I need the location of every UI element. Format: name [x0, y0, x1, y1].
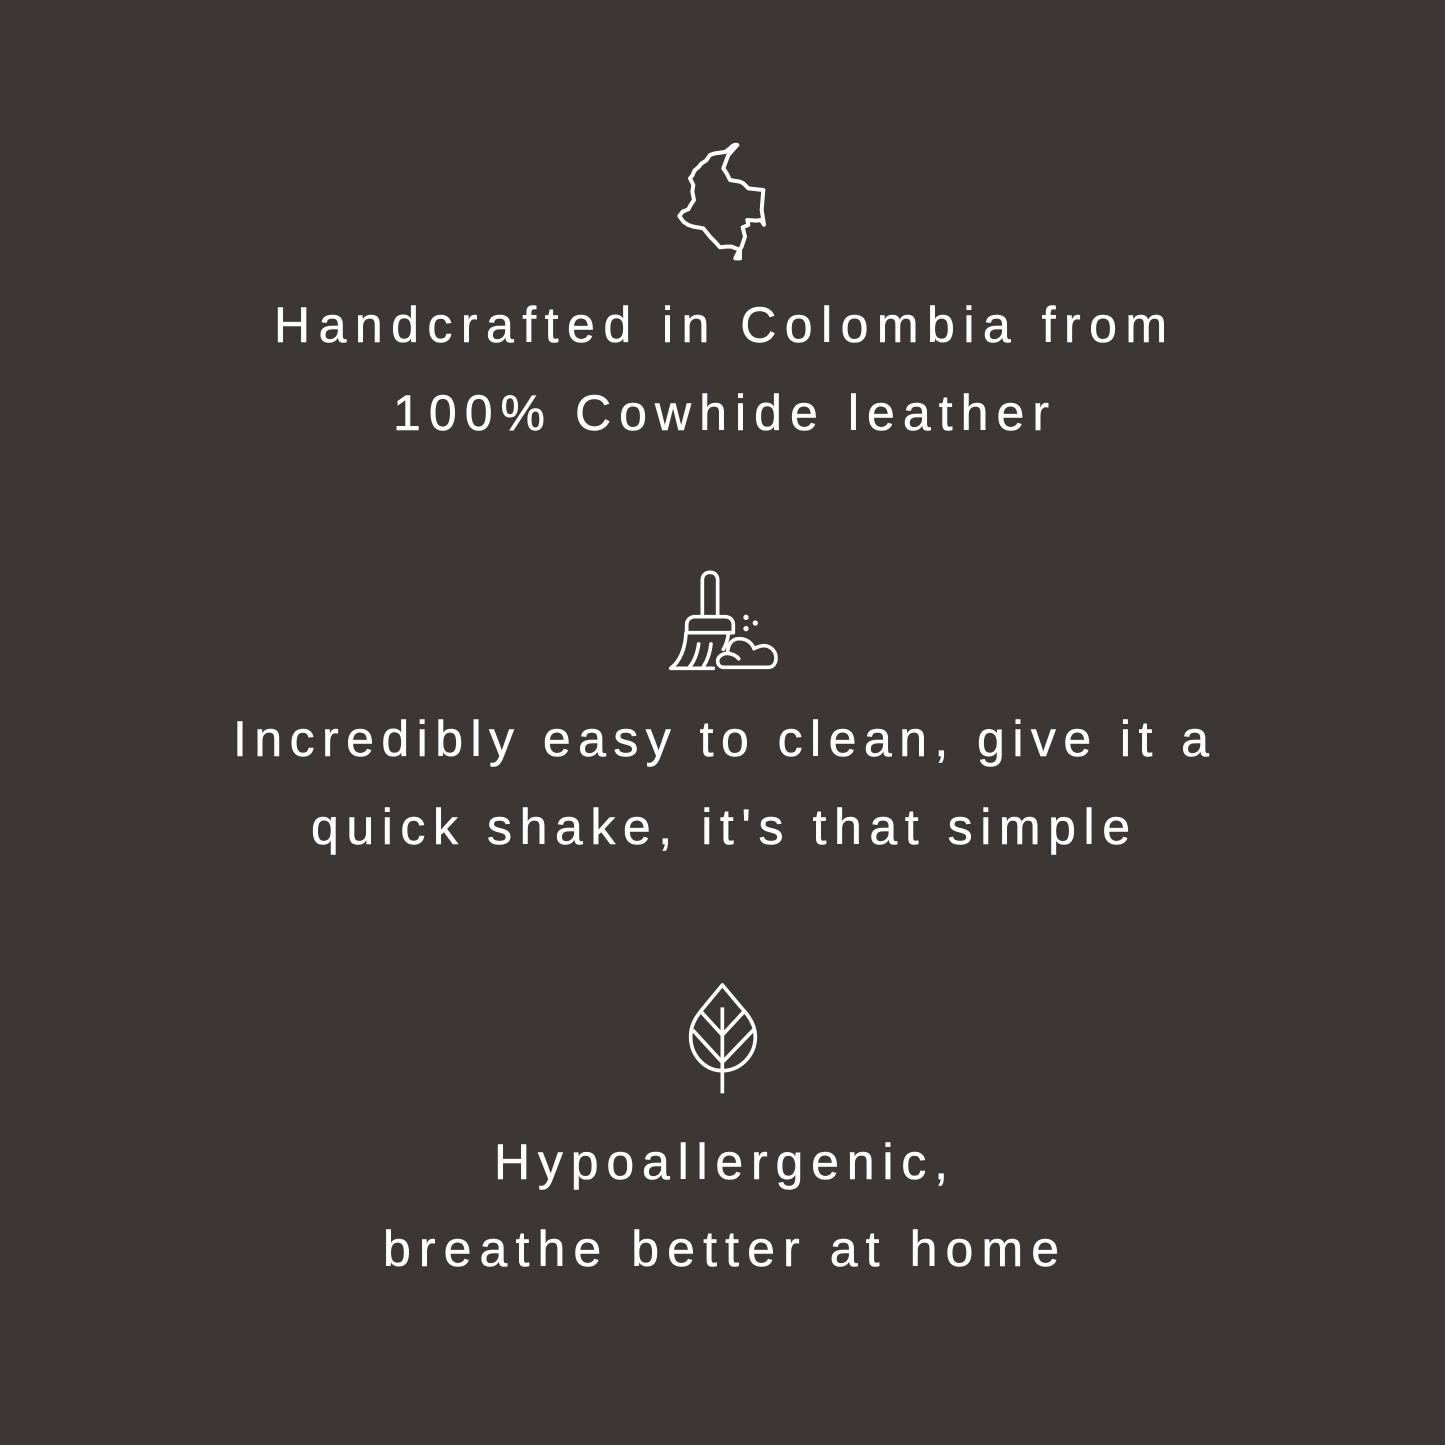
heading text: hypoallergenic: Hypoallergenic,	[494, 1134, 948, 1190]
icon: leaf	[691, 985, 755, 1093]
panel: hypoallergenic feature	[383, 985, 1059, 1277]
heading text: cleaning: Incredibly easy to clean, give it a	[233, 711, 1209, 767]
icon: map of Colombia	[679, 145, 764, 258]
heading text: cleaning: quick shake, it's that simple	[311, 799, 1130, 855]
heading text: hypoallergenic	[383, 1134, 1059, 1277]
heading text: hypoallergenic: breathe better at home	[383, 1221, 1059, 1277]
heading text: Colombia: 100% Cowhide leather	[393, 385, 1049, 441]
heading text: cleaning	[233, 711, 1209, 855]
panel: easy cleaning feature	[233, 572, 1209, 855]
icon: broom and dust	[671, 572, 776, 668]
heading text: Colombia	[274, 297, 1167, 441]
panel: Colombia feature	[274, 145, 1167, 441]
heading text: Colombia: Handcrafted in Colombia from	[274, 297, 1167, 353]
